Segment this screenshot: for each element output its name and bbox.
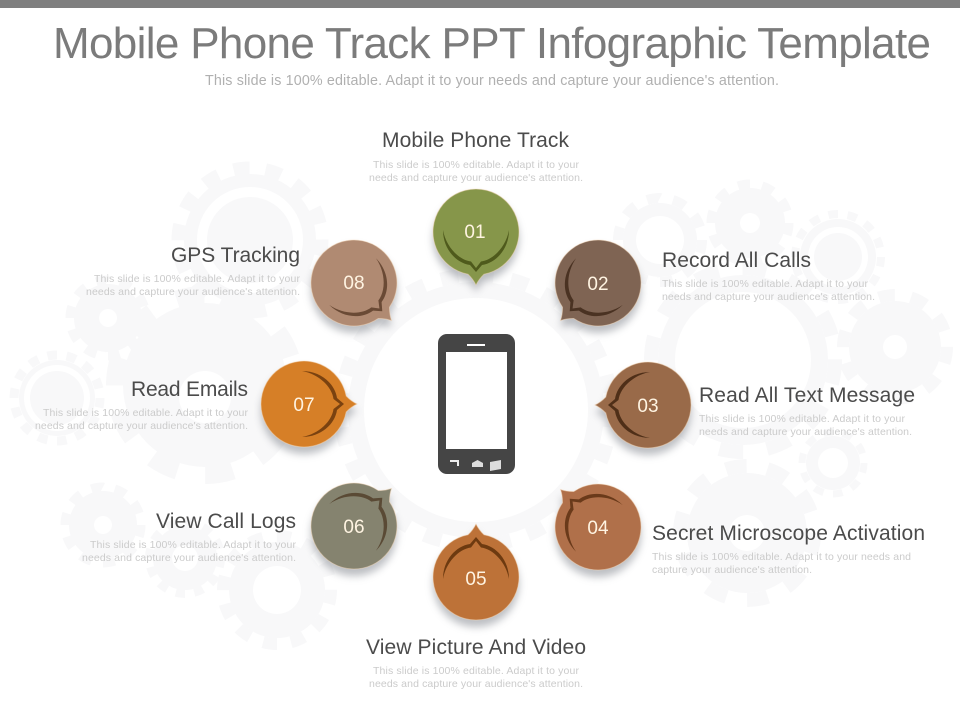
label: View Call Logs: [82, 510, 296, 564]
label: Mobile Phone Track: This slide is 100% editable. Adapt it to your: [373, 159, 580, 171]
label: View Picture And Video: This slide is 100% editable. Adapt it to your: [373, 665, 580, 677]
label: Record All Calls: Record All Calls: [662, 249, 811, 272]
bubble 03: [595, 362, 691, 455]
bubble 04: 04: [587, 518, 609, 539]
label: Record All Calls: [662, 249, 875, 303]
label: Read All Text Message: needs and capture your audience's attention.: [699, 426, 912, 438]
bubble 06: 06: [343, 517, 365, 538]
label: View Picture And Video: needs and capture your audience's attention.: [369, 678, 583, 690]
bubble 05: 05: [465, 569, 487, 590]
label: View Picture And Video: [366, 636, 586, 690]
central phone icon: [438, 334, 515, 474]
bubble 04: [530, 459, 659, 595]
title: Mobile Phone Track PPT Infographic Template: [53, 19, 931, 68]
label: Secret Microscope Activation: This slide is 100% editable. Adapt it to your needs and: [652, 551, 911, 563]
label: Read All Text Message: This slide is 100% editable. Adapt it to your: [699, 413, 906, 425]
bubble 08: [293, 222, 422, 358]
label: Record All Calls: needs and capture your audience's attention.: [662, 291, 875, 303]
label: Read Emails: needs and capture your audience's attention.: [35, 420, 248, 432]
bubble 03: 03: [637, 396, 659, 417]
bubble 01: [433, 189, 519, 292]
bubble 07: 07: [293, 395, 315, 416]
label: Read Emails: [35, 378, 248, 432]
label: Read Emails: This slide is 100% editable. Adapt it to your: [43, 407, 248, 419]
background gears: [14, 168, 947, 644]
label: GPS Tracking: [86, 244, 300, 298]
label: Mobile Phone Track: [369, 129, 583, 184]
label: GPS Tracking: needs and capture your audience's attention.: [86, 286, 300, 298]
label: Read All Text Message: Read All Text Message: [699, 384, 915, 407]
label: Secret Microscope Activation: Secret Microscope Activation: [652, 522, 925, 545]
label: Mobile Phone Track: Mobile Phone Track: [382, 129, 570, 152]
label: Read Emails: Read Emails: [131, 378, 248, 401]
label: View Call Logs: View Call Logs: [156, 510, 296, 533]
bubble 01: 01: [464, 222, 486, 243]
label: Mobile Phone Track: needs and capture your audience's attention.: [369, 172, 583, 184]
bubble 02: 02: [587, 274, 609, 295]
label: Read All Text Message: [699, 384, 915, 438]
label: View Picture And Video: View Picture And Video: [366, 636, 586, 659]
bubble 07: [261, 361, 357, 454]
label: Record All Calls: This slide is 100% editable. Adapt it to your: [662, 278, 868, 290]
bubble 06: [293, 458, 422, 594]
label: Secret Microscope Activation: [652, 522, 925, 576]
label: View Call Logs: needs and capture your audience's attention.: [82, 552, 296, 564]
bubble 02: [530, 222, 659, 358]
label: View Call Logs: This slide is 100% editable. Adapt it to your: [90, 539, 296, 551]
label: Secret Microscope Activation: capture your audience's attention.: [652, 564, 812, 576]
subtitle: This slide is 100% editable. Adapt it to your needs and capture your audience's attention.: [205, 73, 779, 89]
label: GPS Tracking: This slide is 100% editable. Adapt it to your: [94, 273, 300, 285]
bubble 05: [433, 524, 519, 627]
label: GPS Tracking: GPS Tracking: [171, 244, 300, 267]
bubble 08: 08: [343, 273, 365, 294]
top bar: [0, 0, 960, 8]
